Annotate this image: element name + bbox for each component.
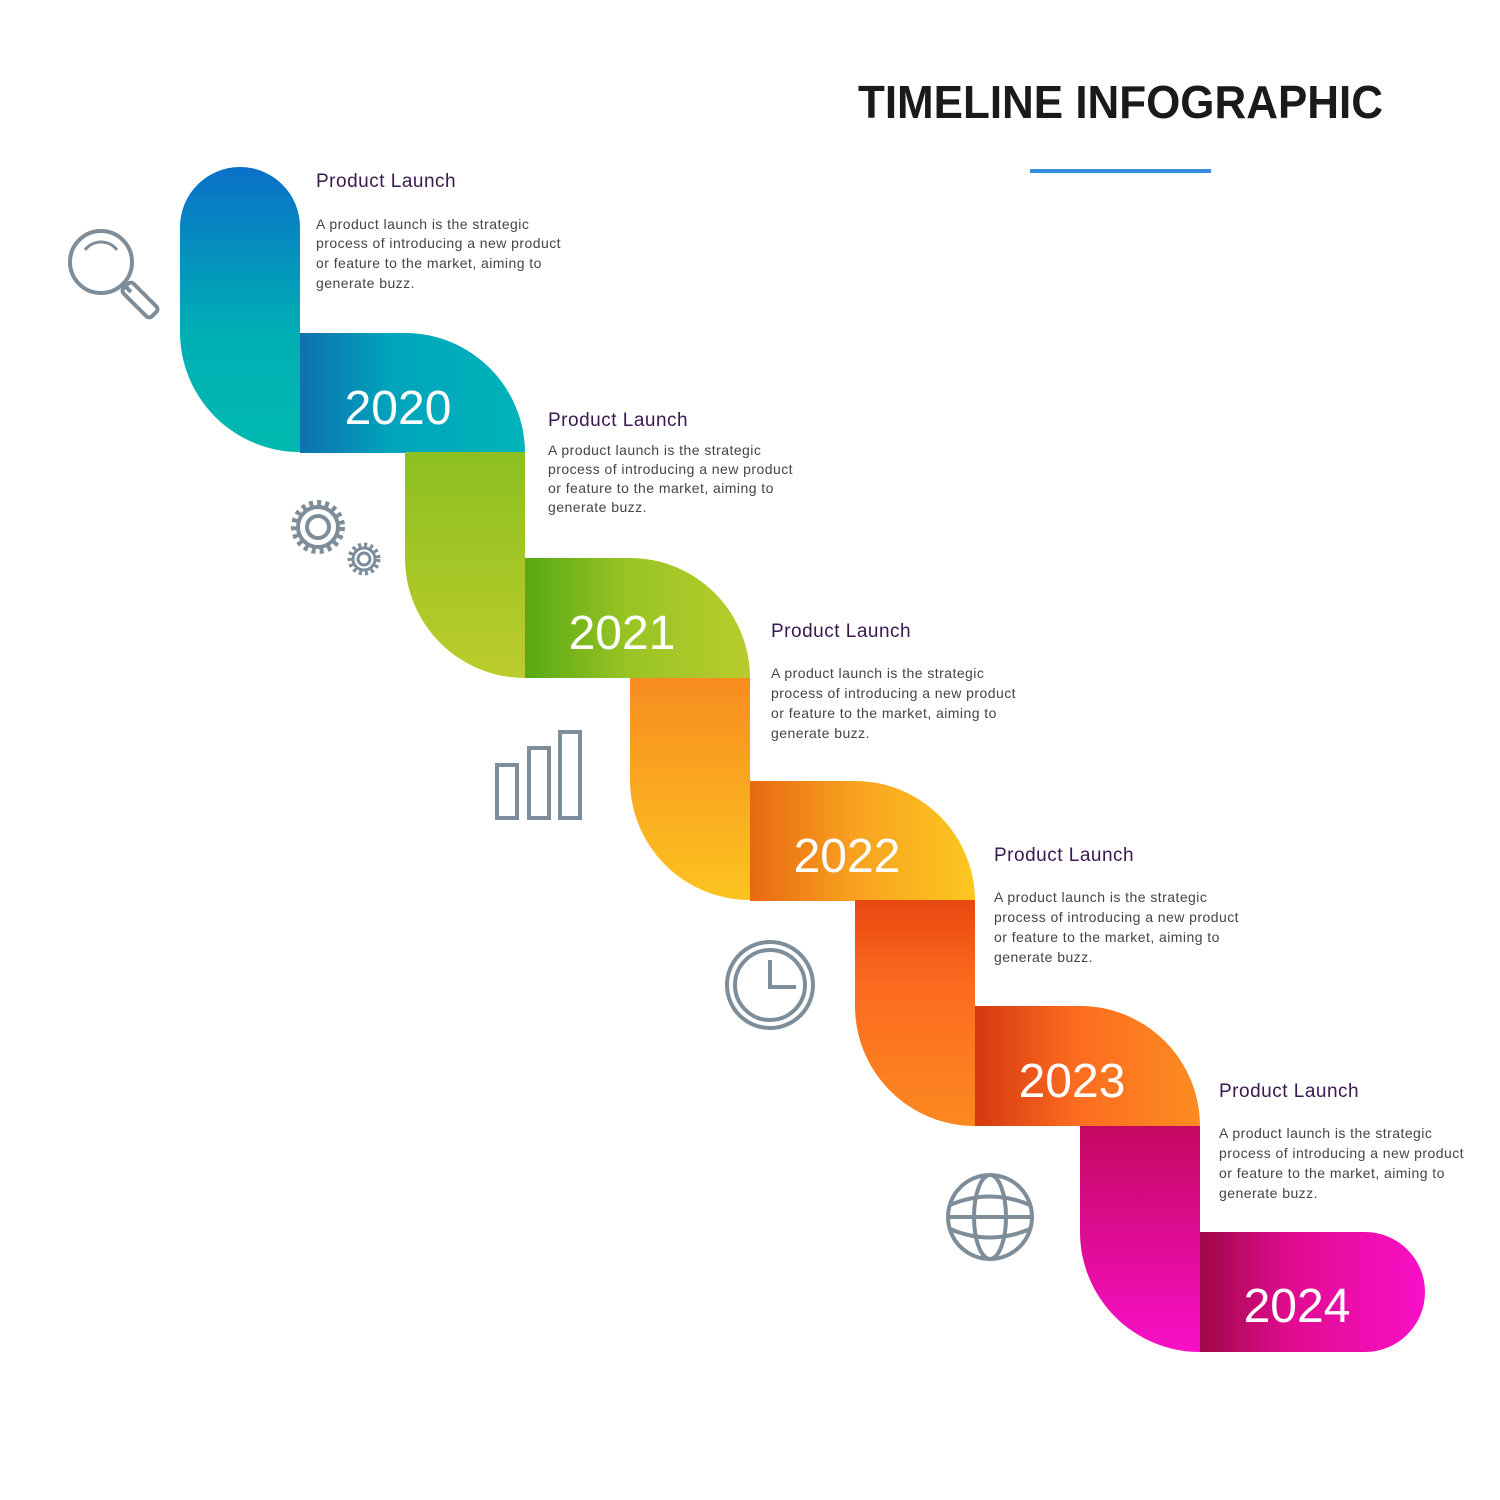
text block 2020 [316, 171, 561, 291]
icon: gears [294, 503, 378, 573]
text block 2022 [771, 621, 1016, 741]
icon: bar chart [497, 732, 580, 818]
ribbon step: 2020 [180, 167, 525, 453]
text block 2022: generate buzz. [771, 725, 870, 741]
text block 2024: process of introducing a new product [1219, 1145, 1464, 1161]
text block 2021: generate buzz. [548, 499, 647, 515]
ribbon step: 2022 [630, 678, 975, 901]
text block 2021: process of introducing a new product [548, 461, 793, 477]
text block 2020: A product launch is the strategic [316, 216, 529, 232]
text block 2024: generate buzz. [1219, 1185, 1318, 1201]
text block 2021: or feature to the market, aiming to [548, 480, 774, 496]
ribbon step: 2022: 2022 [794, 830, 900, 883]
text block 2023: Product Launch [994, 845, 1134, 866]
title underline [1030, 169, 1211, 173]
icon: clock [727, 942, 813, 1028]
text block 2020: generate buzz. [316, 275, 415, 291]
text block 2022: A product launch is the strategic [771, 665, 984, 681]
text block 2024: or feature to the market, aiming to [1219, 1165, 1445, 1181]
text block 2024: A product launch is the strategic [1219, 1125, 1432, 1141]
text block 2022: or feature to the market, aiming to [771, 705, 997, 721]
text block 2023: or feature to the market, aiming to [994, 929, 1220, 945]
ribbon step: 2023 [855, 900, 1200, 1126]
icon: magnifier [70, 231, 159, 319]
text block 2023: A product launch is the strategic [994, 889, 1207, 905]
text block 2021 [548, 410, 793, 515]
text block 2024 [1219, 1081, 1464, 1201]
ribbon step: 2024 [1080, 1126, 1425, 1352]
ribbon step: 2023: 2023 [1019, 1055, 1125, 1108]
text block 2021: Product Launch [548, 410, 688, 431]
icon: globe [948, 1175, 1032, 1259]
text block 2024: Product Launch [1219, 1081, 1359, 1102]
ribbon step: 2021: 2021 [569, 607, 675, 660]
text block 2022: Product Launch [771, 621, 911, 642]
text block 2020: or feature to the market, aiming to [316, 255, 542, 271]
text block 2020: process of introducing a new product [316, 235, 561, 251]
text block 2020: Product Launch [316, 171, 456, 192]
ribbon step: 2024: 2024 [1244, 1280, 1350, 1333]
text block 2023: generate buzz. [994, 949, 1093, 965]
ribbon step: 2021 [405, 452, 750, 678]
text block 2023: process of introducing a new product [994, 909, 1239, 925]
ribbon step: 2020: 2020 [345, 382, 451, 435]
text block 2023 [994, 845, 1239, 965]
text block 2022: process of introducing a new product [771, 685, 1016, 701]
text block 2021: A product launch is the strategic [548, 442, 761, 458]
title: TIMELINE INFOGRAPHIC [858, 76, 1383, 128]
